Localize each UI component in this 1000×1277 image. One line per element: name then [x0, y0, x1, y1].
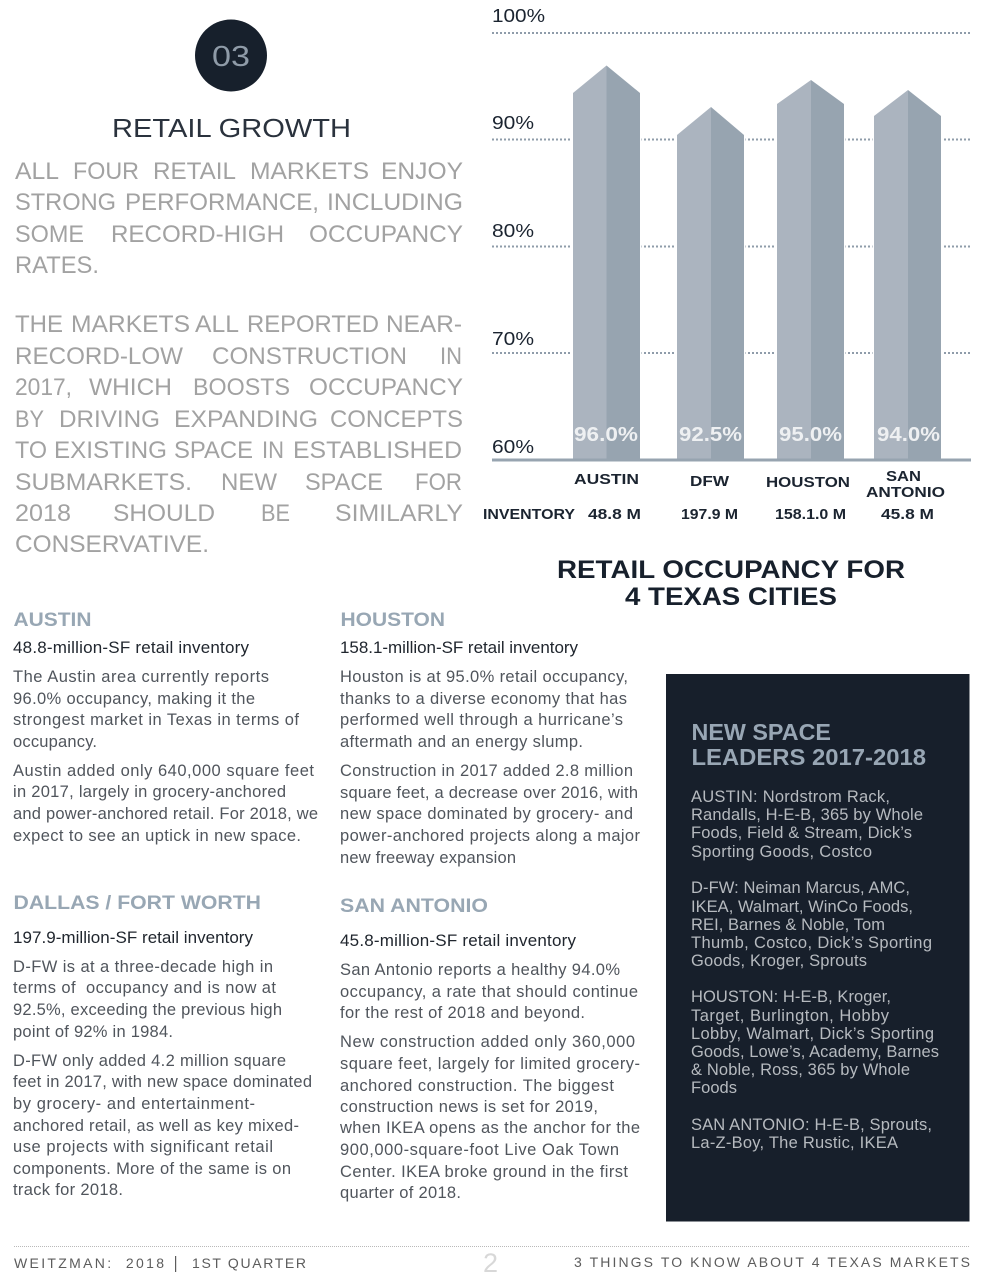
text block: Austin: [13, 610, 318, 845]
panel list: Houston: Lobby, Walmart, Dick’s Sporting: [691, 1025, 934, 1043]
city labels: AUSTIN: [574, 472, 639, 488]
inventory row: 48.8 M: [588, 507, 641, 523]
text block: Houston: square feet, a decrease over 2016, with: [340, 784, 638, 802]
bar values: 95.0%: [779, 423, 842, 446]
panel heading: [692, 719, 926, 770]
text block: Dallas / Fort Worth: point of 92% in 1984.: [13, 1023, 173, 1041]
text block: Austin: 48.8-million-SF retail inventory: [13, 638, 250, 657]
text block: Dallas / Fort Worth: 92.5%, exceeding the previous high: [13, 1001, 282, 1019]
panel list: Houston: [691, 988, 939, 1097]
panel list: Austin: [691, 788, 923, 861]
text block: Houston: [340, 610, 640, 867]
bar: Houston: [777, 80, 844, 459]
intro paragraph 2: EXISTING: [54, 437, 167, 464]
intro paragraph 2: 2018: [15, 500, 71, 527]
axis labels: [492, 6, 545, 457]
intro paragraph 2: NEW: [221, 469, 277, 496]
bar: DFW: [677, 107, 744, 459]
section number badge: [195, 20, 267, 92]
bar: Austin: [573, 66, 640, 459]
footer: WEITZMAN: 2018: [14, 1255, 164, 1271]
intro paragraph 2: FOR: [415, 469, 462, 496]
city labels: HOUSTON: [766, 475, 850, 491]
intro paragraph 2: SPACE: [174, 437, 253, 464]
panel list: Austin: Foods, Field & Stream, Dick’s: [691, 824, 912, 842]
text block: San Antonio: 900,000-square-foot Live Oak Town: [340, 1141, 619, 1159]
text block: Houston: thanks to a diverse economy that has: [340, 690, 627, 708]
panel heading: LEADERS 2017-2018: [692, 744, 926, 770]
text block: Austin: 96.0% occupancy, making it the: [13, 690, 255, 708]
intro paragraph 1: FOUR: [73, 158, 139, 185]
intro paragraph 2: WHICH: [89, 374, 172, 401]
intro paragraph 1: ENJOY: [381, 158, 463, 185]
inventory row: 45.8 M: [881, 507, 934, 523]
section number badge: 03: [212, 41, 250, 73]
intro paragraph 2: CONCEPTS: [330, 406, 463, 433]
panel list: Austin: Sporting Goods, Costco: [691, 843, 872, 861]
text block: Dallas / Fort Worth: D-FW is at a three-decade high in: [13, 958, 273, 976]
panel list: Houston: Target, Burlington, Hobby: [691, 1007, 890, 1025]
city labels: ANTONIO: [866, 485, 945, 501]
panel list: Houston: HOUSTON: H-E-B, Kroger,: [691, 988, 891, 1006]
intro paragraph 1: PERFORMANCE,: [125, 189, 319, 216]
section title: RETAIL GROWTH: [112, 113, 351, 143]
text block: Dallas / Fort Worth: components. More of the same is on: [13, 1160, 291, 1178]
chart title: RETAIL OCCUPANCY FOR: [557, 556, 905, 584]
text block: Dallas / Fort Worth: use projects with significant retail: [13, 1138, 273, 1156]
intro paragraph 2: BE: [261, 500, 290, 527]
intro paragraph 2: IN: [440, 343, 462, 370]
text block: Austin: strongest market in Texas in terms of: [13, 711, 299, 729]
axis labels: 90%: [492, 113, 534, 133]
intro paragraph 2: ALL: [195, 311, 239, 338]
intro paragraph 2: OCCUPANCY: [309, 374, 463, 401]
intro paragraph 2: REPORTED: [247, 311, 379, 338]
text block: San Antonio: Center. IKEA broke ground in the first: [340, 1163, 628, 1181]
bar chart: retail occupancy: [483, 6, 971, 523]
intro paragraph 1: ALL: [15, 158, 59, 185]
panel list: Houston: & Noble, Ross, 365 by Whole: [691, 1061, 910, 1079]
intro paragraph 2: CONSERVATIVE.: [15, 531, 209, 558]
intro paragraph 2: SIMILARLY: [335, 500, 463, 527]
panel list: D-FW: IKEA, Walmart, WinCo Foods,: [691, 898, 913, 916]
panel heading: NEW SPACE: [692, 719, 831, 745]
bar values: 94.0%: [877, 423, 940, 446]
inventory row: INVENTORY: [483, 507, 575, 523]
text block: Dallas / Fort Worth: track for 2018.: [13, 1181, 123, 1199]
intro paragraph 1: RECORD-HIGH: [111, 221, 284, 248]
panel list: D-FW: Thumb, Costco, Dick’s Sporting: [691, 934, 932, 952]
panel list: Houston: Foods: [691, 1079, 737, 1097]
intro paragraph 1: RATES.: [15, 252, 99, 279]
bar values: 96.0%: [574, 423, 638, 446]
text block: Dallas / Fort Worth: by grocery- and entertainment-: [13, 1095, 255, 1113]
intro paragraph 1: OCCUPANCY: [309, 221, 463, 248]
axis labels: 60%: [492, 437, 534, 457]
text block: Austin: expect to see an uptick in new space.: [13, 827, 301, 845]
footer: 3 THINGS TO KNOW ABOUT 4 TEXAS MARKETS: [574, 1254, 970, 1270]
inventory row: [483, 507, 934, 523]
intro paragraph 1: SOME: [15, 221, 84, 248]
panel list: Austin: Randalls, H-E-B, 365 by Whole: [691, 806, 923, 824]
city labels: SAN: [886, 469, 921, 485]
text block: San Antonio: 45.8-million-SF retail inventory: [340, 931, 576, 950]
intro paragraph 2: MARKETS: [71, 311, 190, 338]
text block: Dallas / Fort Worth: anchored retail, as well as key mixed-: [13, 1117, 299, 1135]
text block: Austin: AUSTIN: [14, 610, 92, 631]
text block: Dallas / Fort Worth: terms of occupancy and is now at: [13, 979, 276, 997]
text block: Dallas / Fort Worth: DALLAS / FORT WORTH: [14, 893, 261, 914]
text block: Houston: power-anchored projects along a major: [340, 827, 640, 845]
text block: Dallas / Fort Worth: feet in 2017, with new space dominated: [13, 1073, 312, 1091]
intro paragraph 1: INCLUDING: [327, 189, 463, 216]
panel list: San Antonio: SAN ANTONIO: H-E-B, Sprouts,: [691, 1116, 932, 1134]
intro paragraph 2: ESTABLISHED: [293, 437, 462, 464]
panel list: San Antonio: [691, 1116, 932, 1152]
text block: San Antonio: occupancy, a rate that should continue: [340, 983, 638, 1001]
text block: San Antonio: San Antonio reports a healthy 94.0%: [340, 961, 620, 979]
text block: Austin: The Austin area currently reports: [13, 668, 269, 686]
text block: Dallas / Fort Worth: 197.9-million-SF retail inventory: [13, 928, 254, 947]
text block: Houston: new freeway expansion: [340, 849, 516, 867]
intro paragraph 2: IN: [262, 437, 284, 464]
bar values: [574, 423, 940, 446]
text block: Austin: Austin added only 640,000 square feet: [13, 762, 314, 780]
panel list: D-FW: Goods, Kroger, Sprouts: [691, 952, 867, 970]
city labels: DFW: [690, 474, 729, 490]
intro paragraph 2: RECORD-LOW: [15, 343, 183, 370]
text block: San Antonio: New construction added only 360,000: [340, 1033, 635, 1051]
intro paragraph 2: 2017,: [15, 374, 72, 401]
axis labels: 100%: [492, 6, 545, 26]
intro paragraph 1: STRONG: [15, 189, 116, 216]
intro paragraph 2: NEAR-: [386, 311, 462, 338]
text block: San Antonio: for the rest of 2018 and beyond.: [340, 1004, 585, 1022]
bar values: 92.5%: [679, 423, 742, 446]
text block: Austin: and power-anchored retail. For 2018, we: [13, 805, 318, 823]
intro paragraph 1: [15, 158, 463, 279]
intro paragraph 2: THE: [15, 311, 63, 338]
text block: Houston: Construction in 2017 added 2.8 million: [340, 762, 633, 780]
footer: 1ST QUARTER: [192, 1255, 306, 1271]
text block: Dallas / Fort Worth: [13, 893, 312, 1199]
text block: Dallas / Fort Worth: D-FW only added 4.2 million square: [13, 1052, 286, 1070]
text block: Houston: new space dominated by grocery- and: [340, 805, 633, 823]
text block: San Antonio: SAN ANTONIO: [340, 896, 488, 917]
inventory row: 197.9 M: [681, 507, 738, 523]
intro paragraph 2: SUBMARKETS.: [15, 469, 192, 496]
text block: Houston: HOUSTON: [340, 610, 445, 631]
panel list: D-FW: [691, 879, 932, 970]
panel list: Austin: AUSTIN: Nordstrom Rack,: [691, 788, 890, 806]
intro paragraph 2: CONSTRUCTION: [212, 343, 407, 370]
chart title: 4 TEXAS CITIES: [625, 583, 837, 611]
intro paragraph 2: EXPANDING: [174, 406, 318, 433]
axis labels: 70%: [492, 329, 534, 349]
text block: Houston: 158.1-million-SF retail inventory: [340, 638, 578, 657]
panel list: D-FW: D-FW: Neiman Marcus, AMC,: [691, 879, 910, 897]
intro paragraph 1: MARKETS: [250, 158, 369, 185]
inventory row: 158.1.0 M: [775, 507, 846, 523]
text block: San Antonio: when IKEA opens as the anchor for the: [339, 1119, 640, 1137]
text block: Austin: in 2017, largely in grocery-anchored: [13, 783, 286, 801]
footer: [14, 1246, 970, 1277]
intro paragraph 2: DRIVING: [59, 406, 160, 433]
text block: Houston: Houston is at 95.0% retail occupancy,: [340, 668, 628, 686]
text block: San Antonio: square feet, largely for limited grocery-: [340, 1055, 640, 1073]
text block: Houston: performed well through a hurricane’s: [340, 711, 623, 729]
text block: San Antonio: construction news is set for 2019,: [340, 1098, 598, 1116]
text block: San Antonio: [339, 896, 640, 1202]
panel list: Houston: Goods, Lowe’s, Academy, Barnes: [691, 1043, 939, 1061]
intro paragraph 2: BOOSTS: [193, 374, 290, 401]
text block: Houston: aftermath and an energy slump.: [340, 733, 583, 751]
intro paragraph 2: SHOULD: [113, 500, 215, 527]
intro paragraph 2: [15, 311, 463, 558]
chart title: [557, 556, 905, 611]
bar: San Antonio: [874, 90, 941, 459]
intro paragraph 2: SPACE: [305, 469, 383, 496]
panel list: D-FW: REI, Barnes & Noble, Tom: [691, 916, 885, 934]
axis labels: 80%: [492, 221, 534, 241]
city labels: [574, 469, 945, 501]
panel list: San Antonio: La-Z-Boy, The Rustic, IKEA: [691, 1134, 898, 1152]
intro paragraph 2: TO: [15, 437, 47, 464]
intro paragraph 1: RETAIL: [153, 158, 236, 185]
panel: new space leaders: [666, 674, 970, 1222]
text block: San Antonio: anchored construction. The biggest: [340, 1077, 614, 1095]
text block: San Antonio: quarter of 2018.: [340, 1184, 461, 1202]
intro paragraph 2: BY: [15, 406, 44, 433]
text block: Austin: occupancy.: [13, 733, 97, 751]
